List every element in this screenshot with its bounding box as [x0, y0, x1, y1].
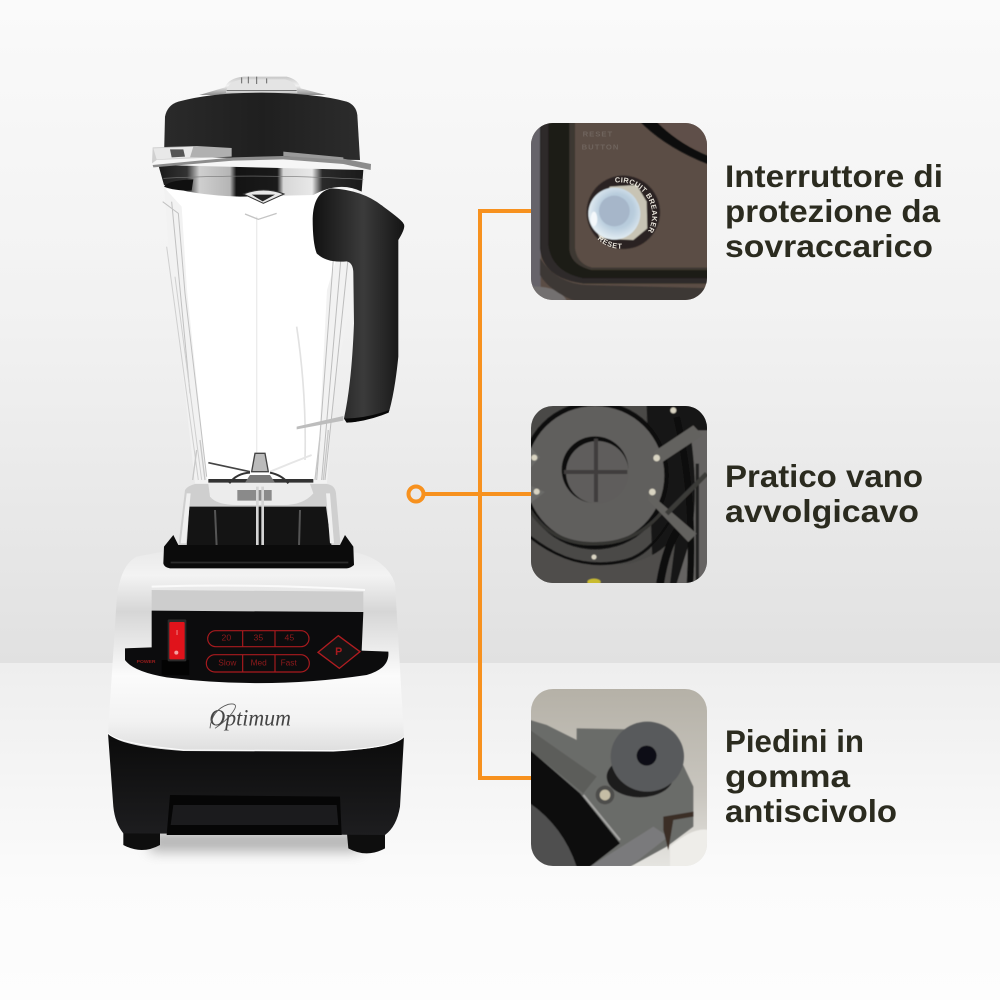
- collar: [163, 535, 354, 568]
- photo text: circuit breaker: CIRCUIT BREAKER: [615, 177, 658, 233]
- speed buttons: [206, 655, 309, 672]
- motor base lower black: [108, 733, 404, 853]
- label: cord storage: Pratico vano: [725, 458, 923, 494]
- photo text: circuit breaker: [582, 132, 658, 249]
- pulse button: P: [335, 646, 342, 658]
- timer labels: 45: [285, 633, 294, 643]
- measuring cap: [199, 77, 326, 95]
- brand name: Optimum: [209, 705, 291, 731]
- jar rim and dark band: [152, 146, 371, 203]
- power switch: [162, 619, 189, 675]
- control panel: [125, 611, 388, 731]
- label: overload protection: Interruttore di: [725, 158, 943, 194]
- timer labels: 20: [222, 633, 231, 643]
- connector start dot: [408, 486, 424, 502]
- background: wall: [0, 0, 1000, 663]
- photo: cord storage compartment: [531, 406, 707, 583]
- motor base white housing: [108, 552, 404, 752]
- background: floor: [0, 663, 1000, 1000]
- photo text: circuit breaker: RESET: [583, 130, 613, 139]
- label: rubber feet: antiscivolo: [725, 793, 897, 829]
- jar body: [160, 170, 367, 483]
- photo: rubber foot: [530, 689, 708, 867]
- timer buttons: [208, 631, 309, 647]
- photo text: circuit breaker: RESET: [598, 236, 622, 249]
- connector lines: [425, 211, 531, 778]
- label: rubber feet: Piedini in: [725, 723, 864, 759]
- speed labels: Slow: [218, 657, 237, 667]
- label: overload protection: sovraccarico: [725, 228, 933, 264]
- blender shadow: [150, 832, 360, 852]
- timer labels: [222, 633, 294, 643]
- lid: [164, 93, 360, 160]
- speed labels: Med: [251, 657, 267, 667]
- blade assembly and jar foot: [178, 430, 341, 547]
- photo: overload reset button: [531, 123, 707, 300]
- timer labels: 35: [254, 633, 263, 643]
- blender: [108, 77, 404, 853]
- photo text: circuit breaker: BUTTON: [582, 142, 619, 151]
- label: cord storage: avvolgicavo: [725, 493, 919, 529]
- label: rubber feet: gomma: [725, 758, 851, 794]
- handle: [297, 188, 404, 429]
- speed labels: [218, 657, 297, 667]
- power switch: I: [176, 628, 178, 637]
- pulse button: [318, 636, 360, 668]
- power label: POWER: [137, 659, 156, 665]
- speed labels: Fast: [281, 657, 297, 667]
- label: overload protection: protezione da: [725, 193, 941, 229]
